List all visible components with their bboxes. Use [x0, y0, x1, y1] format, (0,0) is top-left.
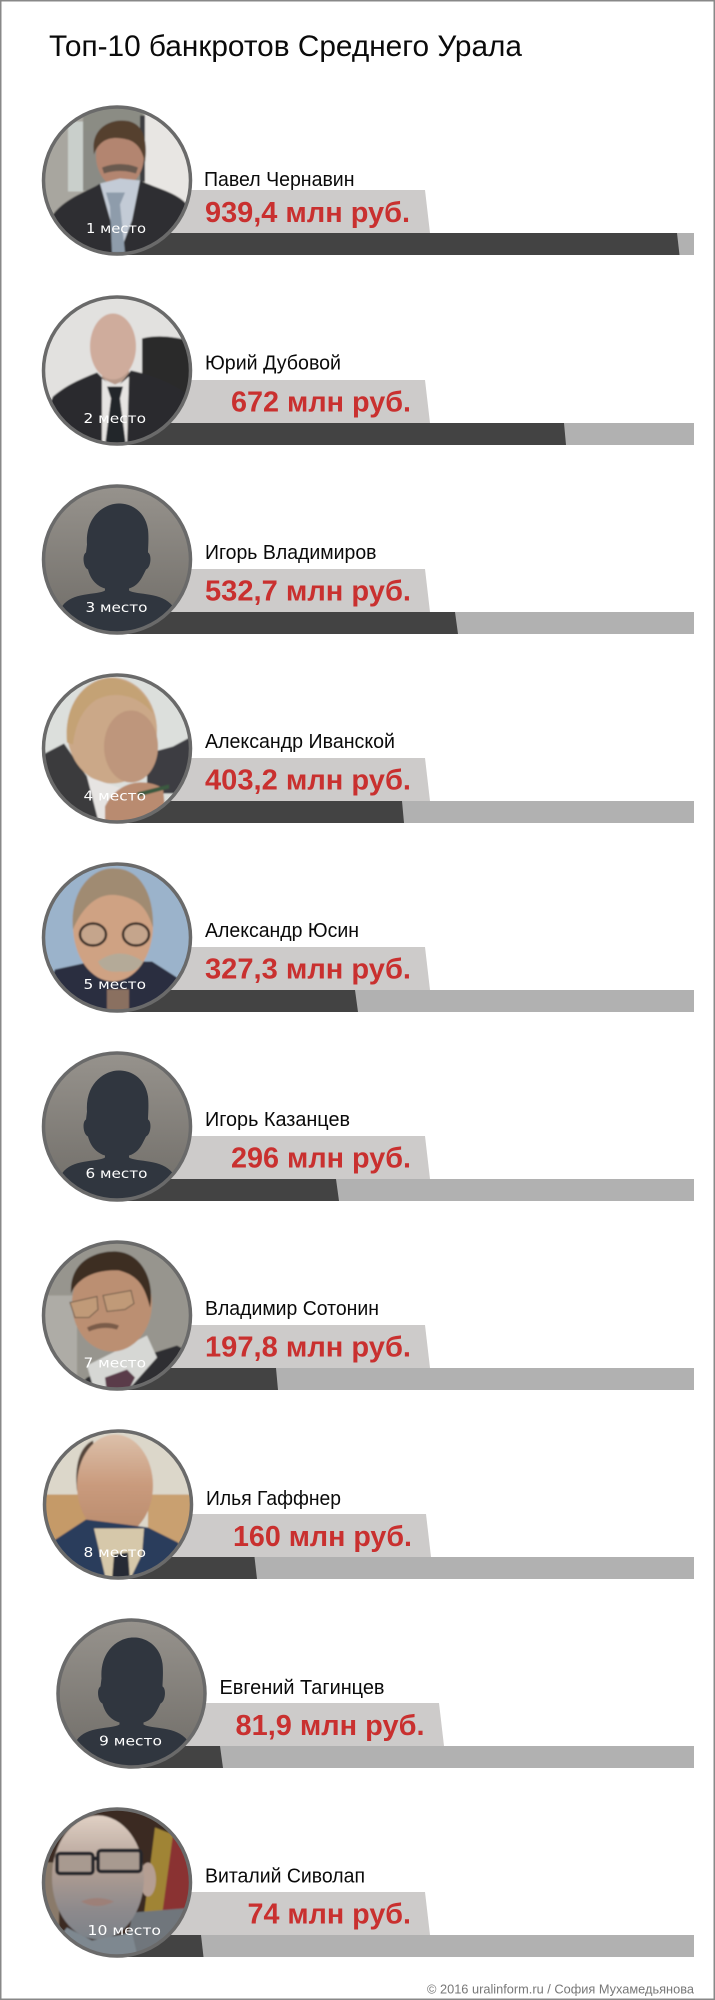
bar track	[110, 990, 694, 1012]
portrait ring	[44, 486, 190, 633]
value: 327,3 млн руб.	[205, 954, 411, 986]
bar value	[110, 990, 358, 1012]
row 5: Александр Юсин	[37, 862, 694, 1014]
bar track	[110, 1179, 694, 1201]
name: Александр Иванской	[205, 731, 395, 753]
row 3: Игорь Владимиров	[32, 484, 694, 644]
name: Владимир Сотонин	[205, 1298, 379, 1320]
bar track	[110, 1557, 694, 1579]
value: 197,8 млн руб.	[205, 1332, 411, 1364]
bar track	[110, 612, 694, 634]
portrait 3: silhouette	[42, 484, 192, 635]
value panel	[150, 1325, 430, 1368]
value: 296 млн руб.	[231, 1142, 411, 1174]
bar track	[110, 1368, 694, 1390]
name: Илья Гаффнер	[206, 1488, 341, 1510]
portrait ring	[44, 1809, 190, 1956]
name: Юрий Дубовой	[205, 352, 341, 374]
portrait ring	[44, 1242, 190, 1389]
bar track	[110, 233, 694, 255]
value panel	[150, 190, 430, 233]
footer credit: © 2016 uralinform.ru / София Мухамедьянова	[427, 1982, 694, 1996]
row 4: Александр Иванской	[39, 674, 694, 828]
name: Виталий Сиволап	[205, 1866, 365, 1888]
bar value	[110, 233, 680, 255]
rank: 1 место	[86, 221, 146, 237]
value panel	[150, 1892, 430, 1935]
portrait 2	[42, 295, 192, 446]
value: 939,4 млн руб.	[205, 197, 410, 229]
bar value	[125, 1746, 223, 1768]
value: 160 млн руб.	[233, 1521, 412, 1553]
portrait ring	[44, 1053, 190, 1200]
value: 74 млн руб.	[248, 1898, 411, 1930]
portrait ring	[44, 297, 190, 444]
rank: 9 место	[99, 1734, 162, 1750]
rank: 6 место	[86, 1166, 148, 1182]
rank: 3 место	[86, 600, 148, 616]
rank: 4 место	[84, 788, 146, 804]
value panel	[165, 1703, 444, 1746]
portrait ring	[58, 1620, 205, 1767]
bar value	[110, 612, 458, 634]
rank: 5 место	[84, 977, 146, 993]
bar value	[110, 1935, 204, 1957]
name: Игорь Владимиров	[205, 542, 376, 564]
row 9: Евгений Тагинцев	[46, 1618, 694, 1778]
value: 81,9 млн руб.	[236, 1710, 424, 1742]
bar value	[110, 1368, 278, 1390]
value: 672 млн руб.	[231, 386, 411, 418]
value panel	[150, 947, 430, 990]
bar value	[110, 423, 566, 445]
value panel	[150, 380, 430, 423]
value panel	[150, 1136, 430, 1179]
row 6: Игорь Казанцев	[32, 1052, 694, 1212]
portrait 7	[39, 1240, 195, 1394]
portrait 6: silhouette	[42, 1051, 192, 1202]
bar value	[110, 1179, 339, 1201]
portrait 9: silhouette	[56, 1618, 207, 1769]
portrait ring	[44, 675, 190, 822]
bar track	[110, 423, 694, 445]
value panel	[150, 569, 430, 612]
rank: 2 место	[84, 411, 146, 427]
portrait ring	[44, 864, 190, 1011]
row 2: Юрий Дубовой	[32, 296, 694, 450]
name: Игорь Казанцев	[205, 1109, 350, 1131]
rank: 7 место	[84, 1356, 146, 1372]
row 8: Илья Гаффнер	[38, 1430, 694, 1580]
portrait ring	[44, 1431, 192, 1578]
value panel	[150, 758, 430, 801]
name: Александр Юсин	[205, 920, 359, 942]
portrait 4	[39, 674, 195, 828]
portrait 1	[42, 106, 197, 260]
value panel	[152, 1514, 431, 1557]
name: Павел Чернавин	[204, 169, 354, 191]
row 1: Павел Чернавин	[42, 106, 694, 260]
value: 532,7 млн руб.	[205, 576, 411, 608]
name: Евгений Тагинцев	[220, 1677, 384, 1699]
rank: 8 место	[84, 1545, 146, 1561]
bar value	[110, 801, 404, 823]
portrait 5	[37, 862, 197, 1014]
bar track	[110, 801, 694, 823]
bar track	[125, 1746, 694, 1768]
portrait 8	[38, 1430, 198, 1580]
row 7: Владимир Сотонин	[39, 1240, 694, 1394]
value: 403,2 млн руб.	[205, 764, 411, 796]
portrait 10	[39, 1808, 195, 1962]
portrait ring	[44, 107, 190, 254]
bar track	[110, 1935, 694, 1957]
rank: 10 место	[88, 1923, 161, 1939]
bar value	[110, 1557, 257, 1579]
title: Топ-10 банкротов Среднего Урала	[49, 30, 522, 63]
row 10: Виталий Сиволап	[39, 1808, 694, 1962]
